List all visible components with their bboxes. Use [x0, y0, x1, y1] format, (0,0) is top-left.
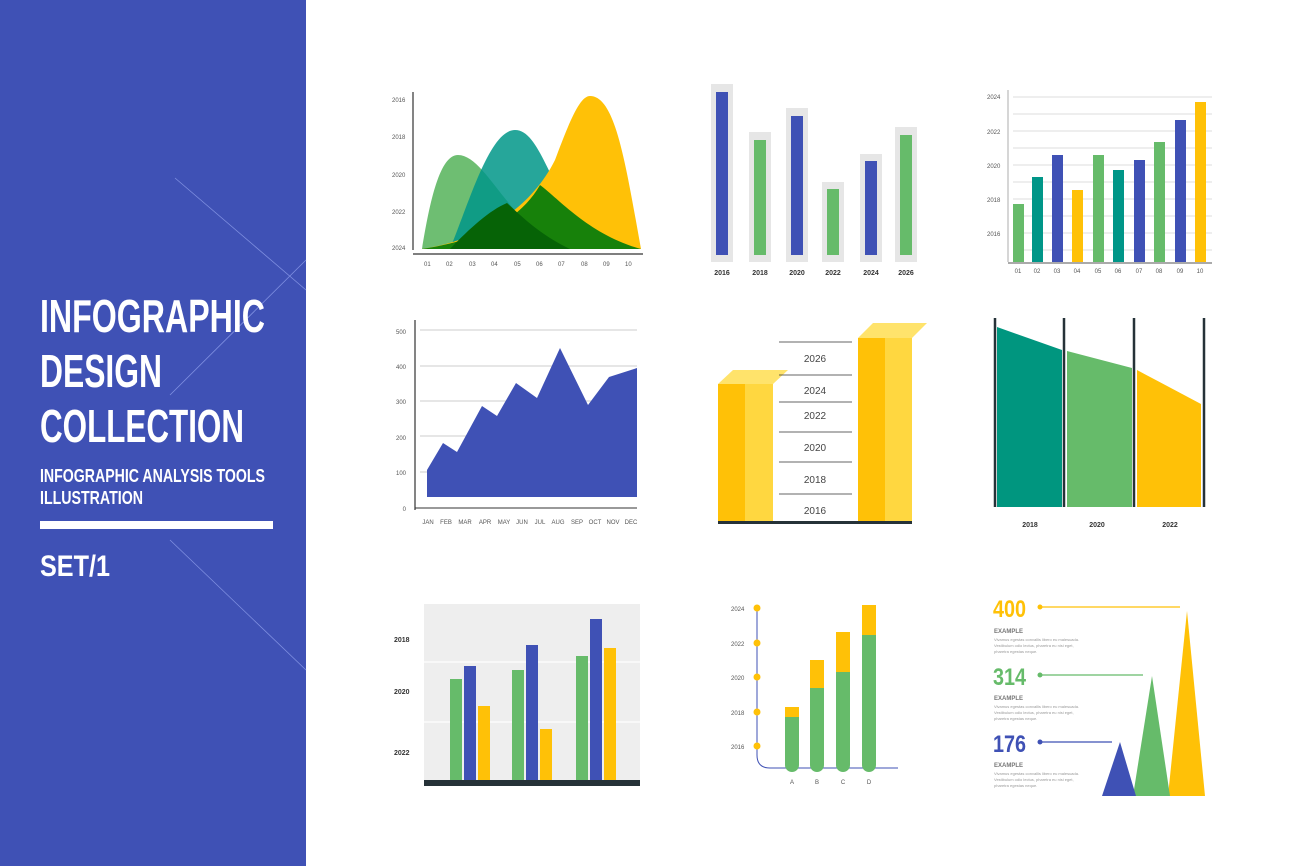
chart 2: bars with grey backgrounds: 2018	[752, 270, 768, 277]
subtitle: ILLUSTRATION	[40, 488, 143, 508]
chart 9: triangles with key figures: pharetra egestas neque.	[994, 716, 1037, 721]
chart 9: triangles with key figures: Vestibulum odio lectus, pharetra eu nisi eget,	[994, 777, 1074, 782]
chart 1: overlapping area curves: 02	[446, 262, 453, 268]
chart 4: blue area chart: FEB	[440, 520, 452, 526]
chart 3: ten-column bar chart: 2024	[987, 95, 1001, 101]
chart 3: ten-column bar chart: 10	[1197, 269, 1204, 275]
chart 6: declining segmented area: 2018	[1022, 522, 1038, 529]
chart 9: triangles with key figures: pharetra egestas neque.	[994, 783, 1037, 788]
chart 9: triangles with key figures: Vivamus egestas convallis libero eu malesuada.	[994, 771, 1079, 776]
chart 8: stacked rounded bars with timeline: B	[815, 780, 819, 786]
chart 8: stacked rounded bars with timeline: 2018	[731, 711, 745, 717]
chart 1: overlapping area curves: 2024	[392, 246, 406, 252]
chart 3: ten-column bar chart: 02	[1034, 269, 1041, 275]
chart 1: overlapping area curves: 01	[424, 262, 431, 268]
chart 4: blue area chart: SEP	[571, 520, 583, 526]
chart 4: blue area chart: 300	[396, 400, 407, 406]
chart 2: bars with grey backgrounds: 2022	[825, 270, 841, 277]
chart 5: 3D yellow bars with year scale: 2020	[804, 443, 827, 454]
chart 5: 3D yellow bars with year scale: 2016	[804, 506, 827, 517]
chart 6: declining segmented area: 2020	[1089, 522, 1105, 529]
chart 9: triangles with key figures: 314	[993, 664, 1027, 691]
chart 8: stacked rounded bars with timeline: C	[841, 780, 846, 786]
chart 3: ten-column bar chart: 08	[1156, 269, 1163, 275]
chart 3: ten-column bar chart: 03	[1054, 269, 1061, 275]
chart 8: stacked rounded bars with timeline: 2016	[731, 745, 745, 751]
chart 1: overlapping area curves: 05	[514, 262, 521, 268]
chart 4: blue area chart: 400	[396, 365, 407, 371]
chart 3: ten-column bar chart: 05	[1095, 269, 1102, 275]
chart 4: blue area chart: JUN	[516, 520, 528, 526]
chart 1: overlapping area curves: 03	[469, 262, 476, 268]
chart 5: 3D yellow bars with year scale: 2024	[804, 386, 827, 397]
chart 9: triangles with key figures: 400	[993, 596, 1026, 623]
left panel	[0, 0, 306, 866]
chart 4: blue area chart: DEC	[625, 520, 638, 526]
chart 2: bars with grey backgrounds: 2016	[714, 270, 730, 277]
chart 3: ten-column bar chart: 2020	[987, 164, 1001, 170]
chart 4: blue area chart	[396, 320, 638, 526]
chart 5: 3D yellow bars with year scale	[718, 323, 927, 524]
chart 1: overlapping area curves: 08	[581, 262, 588, 268]
chart 7: grouped bars on grey panel	[394, 604, 640, 786]
chart 8: stacked rounded bars with timeline: A	[790, 780, 794, 786]
chart 1: overlapping area curves: 04	[491, 262, 498, 268]
chart 7: grouped bars on grey panel: 2022	[394, 750, 410, 757]
chart 1: overlapping area curves: 06	[536, 262, 543, 268]
chart 8: stacked rounded bars with timeline: D	[867, 780, 872, 786]
chart 8: stacked rounded bars with timeline	[731, 604, 898, 786]
chart 1: overlapping area curves	[392, 92, 643, 268]
chart 6: declining segmented area: 2022	[1162, 522, 1178, 529]
title: INFOGRAPHIC	[40, 290, 265, 342]
chart 2: bars with grey backgrounds	[711, 84, 917, 277]
chart 8: stacked rounded bars with timeline: 2022	[731, 642, 745, 648]
chart 2: bars with grey backgrounds: 2026	[898, 270, 914, 277]
chart 1: overlapping area curves: 09	[603, 262, 610, 268]
chart 4: blue area chart: MAR	[458, 520, 472, 526]
chart 9: triangles with key figures: Vivamus egestas convallis libero eu malesuada.	[994, 637, 1079, 642]
title: DESIGN	[40, 345, 162, 397]
chart 9: triangles with key figures: Vestibulum odio lectus, pharetra eu nisi eget,	[994, 710, 1074, 715]
chart 9: triangles with key figures: Vestibulum odio lectus, pharetra eu nisi eget,	[994, 643, 1074, 648]
chart 3: ten-column bar chart: 09	[1177, 269, 1184, 275]
chart 3: ten-column bar chart: 2022	[987, 130, 1001, 136]
chart 8: stacked rounded bars with timeline: 2020	[731, 676, 745, 682]
chart 5: 3D yellow bars with year scale: 2026	[804, 354, 827, 365]
chart 9: triangles with key figures: Vivamus egestas convallis libero eu malesuada.	[994, 704, 1079, 709]
chart 1: overlapping area curves: 2022	[392, 210, 406, 216]
chart 4: blue area chart: APR	[479, 520, 492, 526]
subtitle	[40, 466, 265, 508]
chart 7: grouped bars on grey panel: 2018	[394, 637, 410, 644]
set label: SET/1	[40, 550, 110, 583]
chart 1: overlapping area curves: 07	[558, 262, 565, 268]
chart 3: ten-column bar chart	[987, 90, 1212, 275]
chart 9: triangles with key figures: EXAMPLE	[994, 696, 1023, 702]
chart 9: triangles with key figures: EXAMPLE	[994, 763, 1023, 769]
chart 3: ten-column bar chart: 06	[1115, 269, 1122, 275]
chart 8: stacked rounded bars with timeline: 2024	[731, 607, 745, 613]
chart 6: declining segmented area	[995, 318, 1204, 529]
chart 4: blue area chart: 500	[396, 330, 407, 336]
chart 7: grouped bars on grey panel: 2020	[394, 689, 410, 696]
chart 4: blue area chart: 100	[396, 471, 407, 477]
chart 2: bars with grey backgrounds: 2020	[789, 270, 805, 277]
chart 3: ten-column bar chart: 2016	[987, 232, 1001, 238]
chart 5: 3D yellow bars with year scale: 2022	[804, 411, 827, 422]
chart 4: blue area chart: AUG	[551, 520, 565, 526]
chart 3: ten-column bar chart: 07	[1136, 269, 1143, 275]
chart 9: triangles with key figures: EXAMPLE	[994, 629, 1023, 635]
chart 4: blue area chart: OCT	[589, 520, 602, 526]
chart 5: 3D yellow bars with year scale: 2018	[804, 475, 827, 486]
chart 4: blue area chart: MAY	[498, 520, 510, 526]
chart 1: overlapping area curves: 2018	[392, 135, 406, 141]
chart 9: triangles with key figures: pharetra egestas neque.	[994, 649, 1037, 654]
chart 4: blue area chart: JUL	[535, 520, 546, 526]
chart 1: overlapping area curves: 2020	[392, 173, 406, 179]
chart 9: triangles with key figures	[993, 596, 1205, 796]
chart 4: blue area chart: 200	[396, 436, 407, 442]
chart 4: blue area chart: NOV	[606, 520, 620, 526]
chart 1: overlapping area curves: 2016	[392, 98, 406, 104]
chart 4: blue area chart: JAN	[422, 520, 434, 526]
subtitle: INFOGRAPHIC ANALYSIS TOOLS	[40, 466, 265, 486]
title	[40, 290, 265, 452]
chart 3: ten-column bar chart: 04	[1074, 269, 1081, 275]
chart 4: blue area chart: 0	[403, 507, 407, 513]
chart 1: overlapping area curves: 10	[625, 262, 632, 268]
chart 2: bars with grey backgrounds: 2024	[863, 270, 879, 277]
chart 3: ten-column bar chart: 01	[1015, 269, 1022, 275]
title: COLLECTION	[40, 400, 244, 452]
chart 3: ten-column bar chart: 2018	[987, 198, 1001, 204]
chart 9: triangles with key figures: 176	[993, 731, 1026, 758]
